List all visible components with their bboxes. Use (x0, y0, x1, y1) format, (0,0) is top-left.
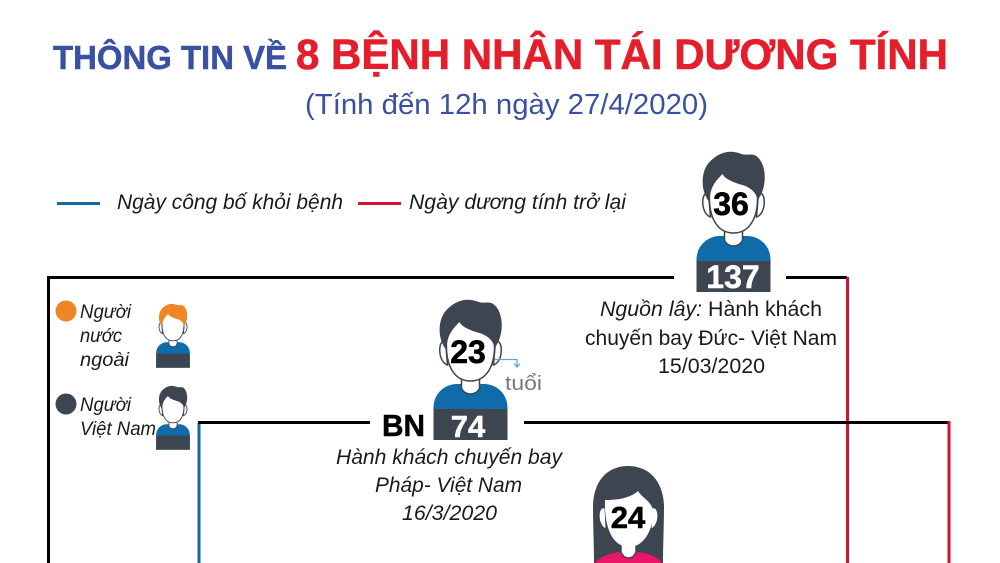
legend: Vietnamese person: Người (80, 394, 132, 416)
patient 74 age: 23 (450, 334, 486, 370)
icon: foreign person (156, 304, 190, 368)
legend: line colours (57, 191, 627, 214)
BN label: BN (382, 408, 425, 443)
patient 137 source (585, 298, 837, 378)
arrow: age pointer (495, 360, 520, 367)
patient 137 number: 137 (706, 259, 760, 295)
patient 74 number: 74 (451, 409, 486, 444)
patient 74 source: Pháp- Việt Nam (375, 474, 522, 497)
female age: 24 (611, 500, 646, 535)
patient 137 age: 36 (713, 186, 749, 222)
icon: patient 74 figure (434, 300, 508, 440)
icon: female figure (593, 466, 664, 563)
legend: line colours: Ngày công bố khỏi bệnh (117, 191, 343, 214)
legend: foreign person: nước (80, 325, 122, 347)
legend: foreign person: Người (80, 301, 132, 323)
patient 137 source: 15/03/2020 (658, 355, 765, 378)
title: 8 BỆNH NHÂN TÁI DƯƠNG TÍNH (296, 30, 948, 79)
legend: Vietnamese person (56, 386, 190, 450)
timeline connector lines (48, 277, 950, 563)
icon: Vietnamese person (156, 386, 190, 450)
patient: female, age 24 (593, 466, 664, 563)
patient 137 (585, 152, 837, 378)
legend: foreign person (56, 300, 190, 371)
patient 74 source: Hành khách chuyến bay (336, 446, 563, 469)
legend: line colours: Ngày dương tính trở lại (409, 191, 627, 214)
icon: patient 137 figure (696, 152, 770, 292)
patient 74 source: 16/3/2020 (402, 502, 497, 525)
legend: Vietnamese person: Việt Nam (80, 418, 156, 440)
patient 74 source (336, 446, 563, 525)
patient 74 (336, 300, 563, 525)
patient 137 source: Nguồn lây: Hành khách (600, 298, 822, 321)
subtitle: (Tính đến 12h ngày 27/4/2020) (305, 89, 708, 121)
legend: foreign person: ngoài (80, 349, 130, 371)
age label: tuổi (505, 373, 542, 395)
patient 137 source: chuyến bay Đức- Việt Nam (585, 327, 837, 350)
title: THÔNG TIN VỀ (53, 38, 287, 76)
